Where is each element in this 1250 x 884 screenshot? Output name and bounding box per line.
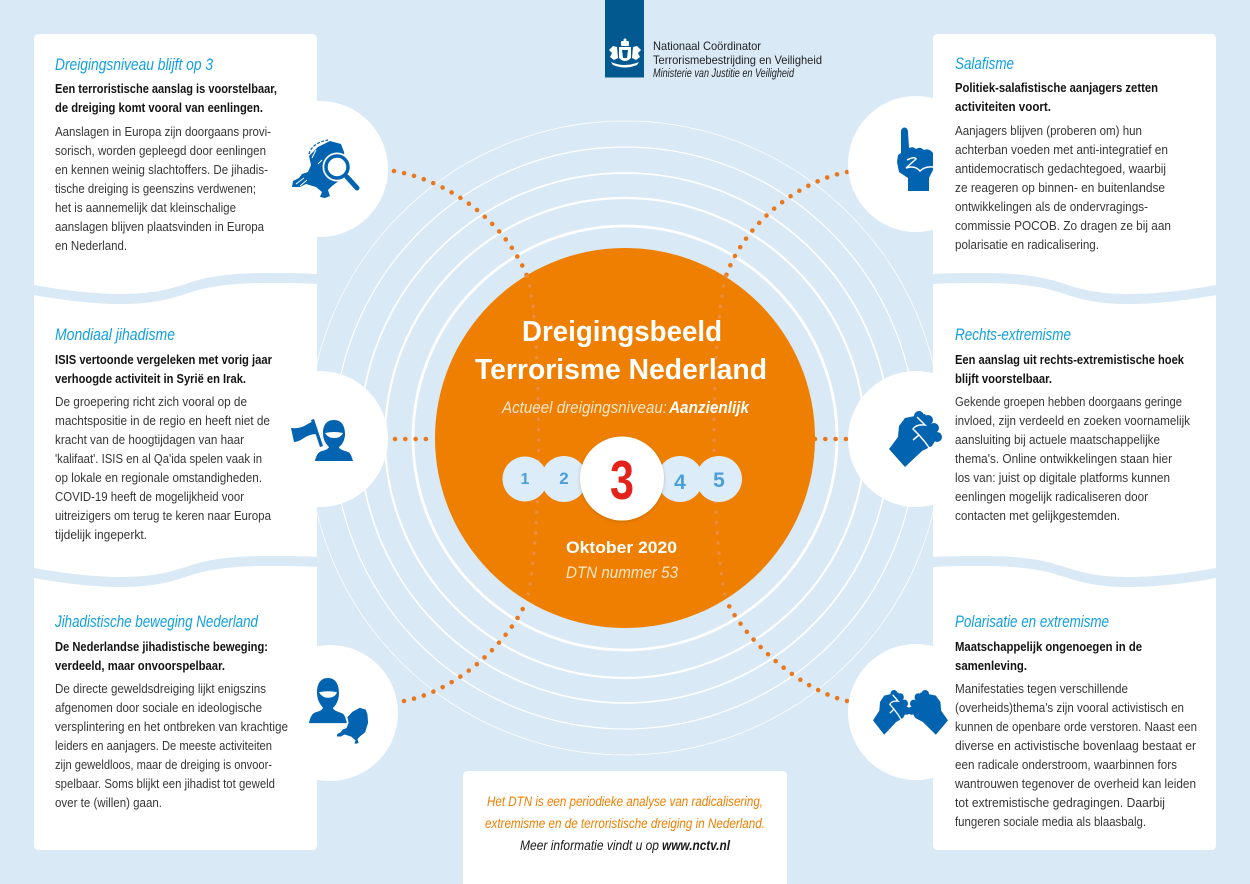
text: global jihadism card: op lokale en regionale omstandigheden. [55, 470, 262, 485]
text: current threat level: Actueel dreigingsniveau: [501, 398, 667, 417]
text: global jihadism card: ISIS vertoonde vergeleken met vorig jaar [55, 352, 272, 367]
text: global jihadism card: machtspositie in de regio en heeft niet de [55, 413, 270, 428]
text: polarisation card: fungeren sociale media als blaasbalg. [955, 814, 1146, 829]
threat level scale 1 to 5: 3 [610, 449, 634, 511]
text: threat level card: aanslagen blijven plaatsvinden in Europa [55, 219, 265, 234]
text: threat level card: de dreiging komt vooral van eenlingen. [55, 100, 263, 115]
text: right-wing extremism card: Gekende groepen hebben doorgaans geringe [955, 394, 1182, 409]
text: Salafism card: Aanjagers blijven (proberen om) hun [955, 123, 1142, 138]
text: threat level card: sorisch, worden gepleegd door eenlingen [55, 143, 266, 158]
text: threat level card: tische dreiging is geenszins verdwenen; [55, 181, 256, 196]
text: Dutch jihadist movement card: De directe geweldsdreiging lijkt enigszins [55, 681, 266, 696]
text: Salafism card: Politiek-salafistische aanjagers zetten [955, 80, 1158, 95]
text: edition date [566, 538, 678, 582]
icon: raised finger hand [897, 128, 933, 191]
panel: about the DTN: Meer informatie vindt u op [520, 838, 659, 853]
text: polarisation card: wantrouwen tegenover de overheid kan leiden [954, 776, 1196, 791]
text: edition date: DTN nummer 53 [566, 563, 678, 582]
text: organisation name: Nationaal Coördinator [653, 39, 761, 53]
text: Salafism card: activiteiten voort. [955, 99, 1051, 114]
text: global jihadism card: Mondiaal jihadisme [55, 325, 175, 344]
text: global jihadism card: uitreizigers om terug te keren naar Europa [55, 508, 272, 523]
text: polarisation card: samenleving. [955, 658, 1027, 673]
text: threat level card: het is aannemelijk dat kleinschalige [55, 200, 236, 215]
text: Dutch jihadist movement card: De Nederlandse jihadistische beweging: [55, 639, 268, 654]
threat level scale 1 to 5: 4 [674, 471, 686, 494]
icon: two fists [873, 690, 948, 735]
text: Salafism card: ze reageren op binnen- en buitenlandse [955, 180, 1165, 195]
icon: masked figure with flag [291, 419, 353, 461]
text: Salafism card: achterban voeden met anti-integratief en [955, 142, 1168, 157]
text: edition date: Oktober 2020 [566, 538, 677, 557]
text: right-wing extremism card: contacten met gelijkgestemden. [955, 508, 1120, 523]
text: Dutch jihadist movement card: zijn geweldloos, maar de dreiging is onvoor- [55, 757, 272, 772]
text: Salafism card: ontwikkelingen als de ondervragings- [955, 199, 1148, 214]
text: Salafism card: commissie POCOB. Zo dragen ze bij aan [955, 218, 1171, 233]
text: organisation name: Terrorismebestrijding en Veiligheid [653, 53, 822, 67]
text: Salafism card: antidemocratisch gedachtegoed, waarbij [955, 161, 1166, 176]
text: organisation name: Ministerie van Justitie en Veiligheid [653, 68, 794, 80]
text: polarisation card: diverse en activistische bovenlaag bestaat er [955, 738, 1197, 753]
text: polarisation card: (overheids)thema's zijn vooral activistisch en [955, 700, 1184, 715]
text: threat level card: Aanslagen in Europa zijn doorgaans provi- [55, 124, 271, 139]
text: polarisation card: kunnen de openbare orde verstoren. Naast een [955, 719, 1197, 734]
panel: about the DTN [463, 771, 787, 884]
text: threat level card: en kennen weinig slachtoffers. De jihadis- [55, 162, 268, 177]
text: polarisation card: Maatschappelijk ongenoegen in de [955, 639, 1142, 654]
heading: main title: Terrorisme Nederland [475, 354, 767, 386]
text: Dutch jihadist movement card: Jihadistische beweging Nederland [54, 612, 258, 631]
text: global jihadism card [55, 325, 272, 542]
text: Salafism card: polarisatie en radicalisering. [955, 237, 1099, 252]
text: threat level card: Een terroristische aanslag is voorstelbaar, [55, 81, 277, 96]
panel: left white cards [34, 34, 398, 850]
text: global jihadism card: 'kalifaat'. ISIS en al Qa'ida spelen vaak in [55, 451, 262, 466]
text: right-wing extremism card: invloed, zijn verdeeld en zoeken voornamelijk [955, 413, 1190, 428]
text: Dutch jihadist movement card [54, 612, 288, 810]
text: Dutch jihadist movement card: leiders en aanjagers. De meeste activiteiten [55, 738, 272, 753]
text: Salafism card: Salafisme [955, 54, 1014, 73]
text: polarisation card: een radicale onderstroom, waarbinnen fors [955, 757, 1177, 772]
text: global jihadism card: verhoogde activiteit in Syrië en Irak. [55, 371, 246, 386]
logo: Rijksoverheid [605, 0, 644, 78]
text: Dutch jihadist movement card: spelbaar. Soms blijkt een jihadist tot geweld [55, 776, 275, 791]
panel: about the DTN: Het DTN is een periodieke analyse van radicalisering, [487, 794, 763, 809]
text: Dutch jihadist movement card: afgenomen door sociale en ideologische [55, 700, 262, 715]
text: Salafism card [955, 54, 1171, 252]
panel: about the DTN: www.nctv.nl [662, 838, 730, 853]
text: right-wing extremism card: eenlingen mogelijk radicaliseren door [955, 489, 1149, 504]
text: right-wing extremism card: Een aanslag uit rechts-extremistische hoek [955, 352, 1185, 367]
threat level scale 1 to 5: 5 [713, 469, 725, 492]
text: threat level card: Dreigingsniveau blijft op 3 [55, 55, 213, 74]
heading: main title: Dreigingsbeeld [522, 316, 722, 348]
icon: Netherlands with magnifier [292, 140, 357, 198]
text: right-wing extremism card: Rechts-extremisme [955, 325, 1071, 344]
text: Dutch jihadist movement card: over te (willen) gaan. [55, 795, 162, 810]
text: right-wing extremism card: thema's. Online ontwikkelingen staan hier [955, 451, 1173, 466]
text: polarisation card [954, 612, 1197, 829]
text: Dutch jihadist movement card: versplintering en het ontbreken van krachtige [55, 719, 288, 734]
panel: right white cards [848, 34, 1216, 850]
threat level scale 1 to 5: 2 [559, 469, 569, 488]
text: organisation name [653, 39, 822, 80]
heading: main title [475, 316, 767, 386]
text: global jihadism card: kracht van de hoogtijdagen van haar [55, 432, 245, 447]
text: global jihadism card: tijdelijk ingeperkt. [55, 527, 147, 542]
text: polarisation card: Manifestaties tegen verschillende [955, 681, 1128, 696]
icon: raised fist [889, 411, 942, 467]
text: polarisation card: tot extremistische gedragingen. Daarbij [955, 795, 1165, 810]
text: global jihadism card: De groepering richt zich vooral op de [55, 394, 247, 409]
panel: central orange circle [435, 248, 815, 628]
text: polarisation card: Polarisatie en extremisme [955, 612, 1109, 631]
text: right-wing extremism card [955, 325, 1190, 523]
panel: about the DTN: extremisme en de terroristische dreiging in Nederland. [485, 816, 765, 831]
text: right-wing extremism card: los van: juist op digitale platforms kunnen [955, 470, 1170, 485]
icon: masked figure with Netherlands [309, 678, 369, 745]
threat level scale 1 to 5: 1 [521, 471, 530, 488]
dotted connectors [394, 171, 847, 701]
text: current threat level: Aanzienlijk [668, 398, 750, 417]
text: threat level card [55, 55, 277, 253]
text: right-wing extremism card: aansluiting bij actuele maatschappelijke [955, 432, 1160, 447]
text: right-wing extremism card: blijft voorstelbaar. [955, 371, 1052, 386]
text: Dutch jihadist movement card: verdeeld, maar onvoorspelbaar. [55, 658, 225, 673]
text: threat level card: en Nederland. [55, 238, 127, 253]
threat level scale 1 to 5 [502, 436, 742, 520]
text: global jihadism card: COVID-19 heeft de mogelijkheid voor [55, 489, 245, 504]
